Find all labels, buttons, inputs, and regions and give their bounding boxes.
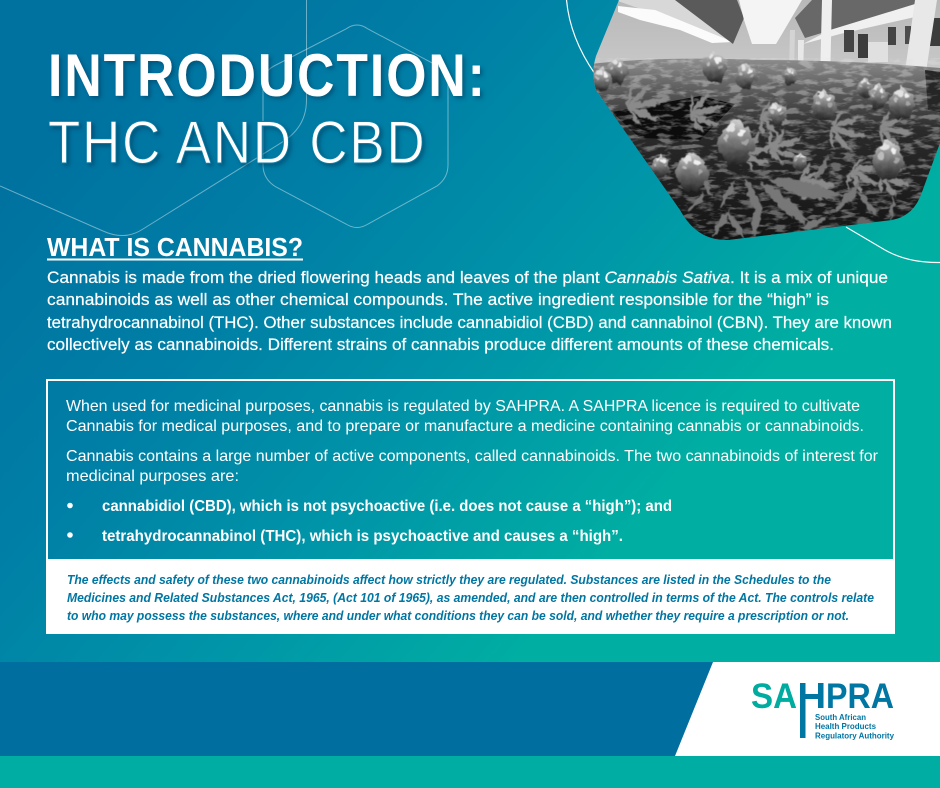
wall fixtures — [844, 30, 854, 52]
bullet list: cannabidiol (CBD), which is not psychoactive (i.e. does not cause a “high”); and — [102, 498, 672, 515]
bullet list: tetrahydrocannabinol (THC), which is psychoactive and causes a “high”. — [102, 528, 623, 545]
SAHPRA logo: Health Products — [815, 721, 876, 731]
thin white curve bottom — [846, 227, 940, 263]
plant canopy — [590, 59, 940, 240]
large foreground leaves — [686, 154, 897, 242]
intro paragraph: Cannabis is made from the dried flowering heads and leaves of the plant Cannabis Sativa. It is a mix of unique — [47, 268, 888, 287]
footer band — [0, 662, 940, 788]
SAHPRA logo: SA — [751, 677, 797, 716]
ceiling beams and lights — [615, 0, 915, 44]
photo: cannabis grow room in greyscale — [590, 0, 940, 242]
bullet list — [67, 498, 672, 545]
title: INTRODUCTION: — [48, 41, 485, 109]
white note strip — [46, 559, 895, 634]
buds — [592, 51, 916, 191]
intro paragraph: cannabinoids as well as other chemical compounds. The active ingredient responsible for the “high” is — [47, 290, 829, 309]
SAHPRA logo: PRA — [826, 677, 894, 716]
SAHPRA logo: South African — [815, 712, 866, 722]
intro paragraph: tetrahydrocannabinol (THC). Other substances include cannabidiol (CBD) and cannabinol (CBN). They are known — [47, 313, 892, 332]
decorative hexagon outlines — [0, 0, 448, 236]
fan leaves and buds — [592, 51, 920, 242]
SAHPRA logo — [751, 677, 894, 740]
columns — [820, 0, 832, 62]
intro paragraph: collectively as cannabinoids. Different strains of cannabis produce different amounts of these chemicals. — [47, 335, 834, 354]
title — [48, 41, 485, 176]
leaf texture — [590, 58, 940, 242]
intro paragraph — [47, 268, 892, 354]
SAHPRA logo: Regulatory Authority — [815, 730, 894, 740]
regulation text: Cannabis for medical purposes, and to prepare or manufacture a medicine containing cannabis or cannabinoids. — [66, 418, 864, 435]
regulation text — [66, 398, 879, 485]
white note strip: Medicines and Related Substances Act, 1965, (Act 101 of 1965), as amended, and are then controlled in terms of the Act. The controls relate — [67, 590, 874, 605]
mid-ground leaves — [624, 84, 916, 202]
regulation text: When used for medicinal purposes, cannabis is regulated by SAHPRA. A SAHPRA licence is required to cultivate — [66, 398, 860, 415]
regulation text: medicinal purposes are: — [66, 468, 239, 485]
panel: regulation box — [46, 380, 895, 634]
title: THC AND CBD — [48, 109, 425, 176]
heading: what is cannabis: WHAT IS CANNABIS? — [47, 234, 303, 262]
regulation text: Cannabis contains a large number of active components, called cannabinoids. The two cannabinoids of interest for — [66, 448, 879, 465]
white note strip: to who may possess the substances, where and under what conditions they can be sold, and whether they require a prescription or not. — [67, 608, 849, 623]
white note strip: The effects and safety of these two cannabinoids affect how strictly they are regulated. Substances are listed in the Schedules to the — [67, 572, 831, 587]
thin white curve top — [566, 0, 595, 74]
